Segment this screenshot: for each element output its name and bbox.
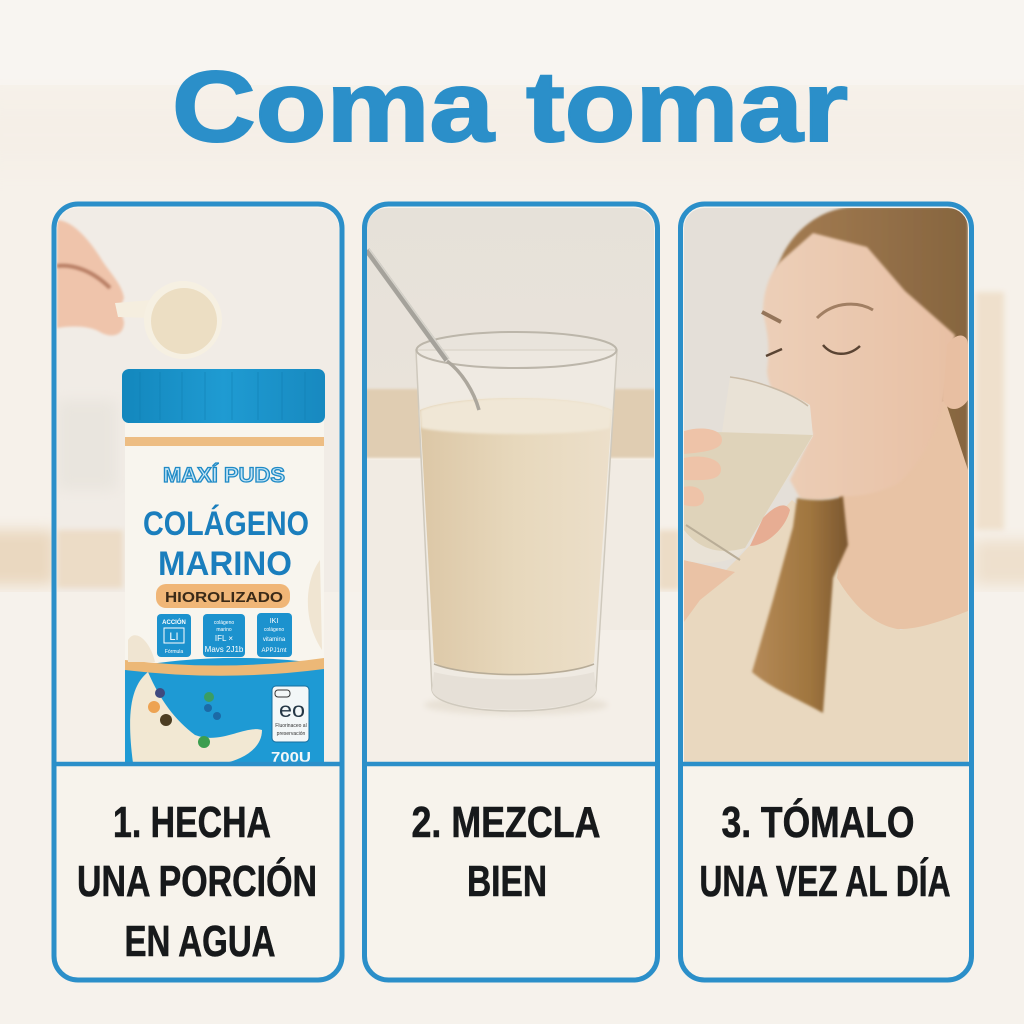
info badges: IFL × xyxy=(215,634,233,643)
info badges: APPJ1mt xyxy=(261,648,287,654)
spoon handle xyxy=(367,249,479,410)
info badges: vitamina xyxy=(263,637,286,643)
panel 2 background xyxy=(367,208,654,630)
hydrolyzed badge xyxy=(156,584,290,608)
step 1 caption xyxy=(77,798,317,966)
info badges: ACCIÓN xyxy=(162,618,186,626)
panel 3 background xyxy=(684,208,968,630)
arm xyxy=(684,560,735,622)
step 2 caption: BIEN xyxy=(467,857,547,906)
cap xyxy=(122,369,325,423)
info badges: colágeno xyxy=(264,627,284,633)
panel 3: woman drinking xyxy=(684,208,968,762)
step 2 caption xyxy=(412,798,600,906)
back hair xyxy=(776,208,968,470)
content badge: preservación xyxy=(277,731,306,737)
net weight: 700U xyxy=(271,749,311,766)
product jar xyxy=(122,369,325,766)
long hair xyxy=(752,496,848,713)
hand xyxy=(684,428,790,546)
neck xyxy=(835,400,968,629)
panel 1 background xyxy=(57,394,125,592)
content badge xyxy=(272,686,309,742)
woman drinking xyxy=(684,207,968,763)
step 3 caption xyxy=(700,797,950,906)
step 1 caption: EN AGUA xyxy=(124,917,276,966)
sweater xyxy=(684,500,968,763)
info badges: LI xyxy=(169,631,179,643)
glass xyxy=(684,377,813,563)
step 2 caption: 2. MEZCLA xyxy=(412,798,600,847)
title: Coma tomar xyxy=(172,51,848,163)
product name: COLÁGENO xyxy=(143,505,309,543)
step 1 caption: UNA PORCIÓN xyxy=(77,856,317,906)
content badge: eo xyxy=(279,699,305,722)
info badges: Fórmula xyxy=(165,649,183,655)
panel 1: scoop and product jar xyxy=(56,218,325,762)
info badges: IKI xyxy=(270,618,278,625)
info badges xyxy=(157,613,292,657)
info badges: marino xyxy=(216,627,232,633)
scoop xyxy=(115,288,217,354)
face xyxy=(763,233,955,500)
info badges: colágeno xyxy=(214,620,234,626)
panel 2: glass with mix xyxy=(367,208,654,717)
hydrolyzed badge: HIOROLIZADO xyxy=(165,589,283,606)
content badge: Fluorinaceo al xyxy=(275,723,307,729)
step 3 caption: 3. TÓMALO xyxy=(722,797,914,847)
icon: glass of collagen drink xyxy=(367,249,617,715)
product jar: MARINO xyxy=(158,545,292,583)
brand logo: MAXÍ PUDS xyxy=(163,464,285,487)
ear xyxy=(943,336,968,409)
panel frames and dividers xyxy=(54,204,972,980)
icon: hand holding scoop xyxy=(57,220,222,359)
info badges: Mavs 2J1b xyxy=(205,645,244,654)
step 1 caption: 1. HECHA xyxy=(113,798,271,847)
brows and eyes xyxy=(762,304,873,356)
